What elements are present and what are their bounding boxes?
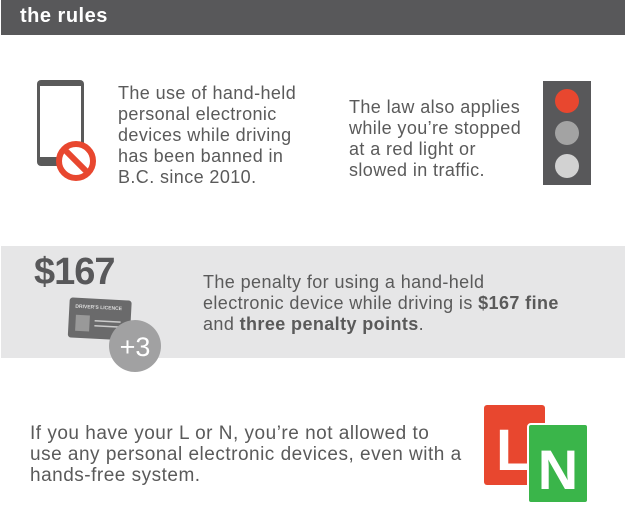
text: red light: at a red light or <box>349 139 476 159</box>
text: penalty: electronic device while driving is $167 fine <box>203 293 559 313</box>
text: L or N: hands-free system. <box>30 465 201 486</box>
header bar <box>1 0 625 35</box>
fine amount: $167 <box>34 251 115 293</box>
icon: L and N signs: N <box>538 438 578 501</box>
text: L or N <box>30 423 462 486</box>
text: ban since 2010: has been banned in <box>118 146 283 166</box>
icon: L and N signs <box>484 405 587 502</box>
icon: licence card: +3 <box>120 332 150 362</box>
text: red light: while you’re stopped <box>349 118 521 138</box>
text: ban since 2010 <box>118 83 296 187</box>
text: ban since 2010: devices while driving <box>118 125 291 145</box>
text: penalty <box>203 272 559 334</box>
text: ban since 2010: personal electronic <box>118 104 277 124</box>
text: penalty: The penalty for using a hand-held <box>203 272 484 292</box>
icon: licence card <box>68 298 161 372</box>
text: red light <box>349 97 521 180</box>
icon: phone with prohibition <box>37 80 96 181</box>
title: the rules <box>20 5 108 27</box>
text: penalty: and three penalty points. <box>203 314 424 334</box>
icon: traffic light <box>543 81 591 185</box>
panel: penalty <box>1 246 625 358</box>
text: L or N: If you have your L or N, you’re not allowed to <box>30 423 429 444</box>
text: ban since 2010: B.C. since 2010. <box>118 167 256 187</box>
text: red light: slowed in traffic. <box>349 160 485 180</box>
icon: licence card: DRIVER'S LICENCE <box>75 304 123 312</box>
icon: L and N signs: L <box>496 418 531 483</box>
text: L or N: use any personal electronic devices, even with a <box>30 444 462 465</box>
text: red light: The law also applies <box>349 97 520 117</box>
text: ban since 2010: The use of hand-held <box>118 83 296 103</box>
